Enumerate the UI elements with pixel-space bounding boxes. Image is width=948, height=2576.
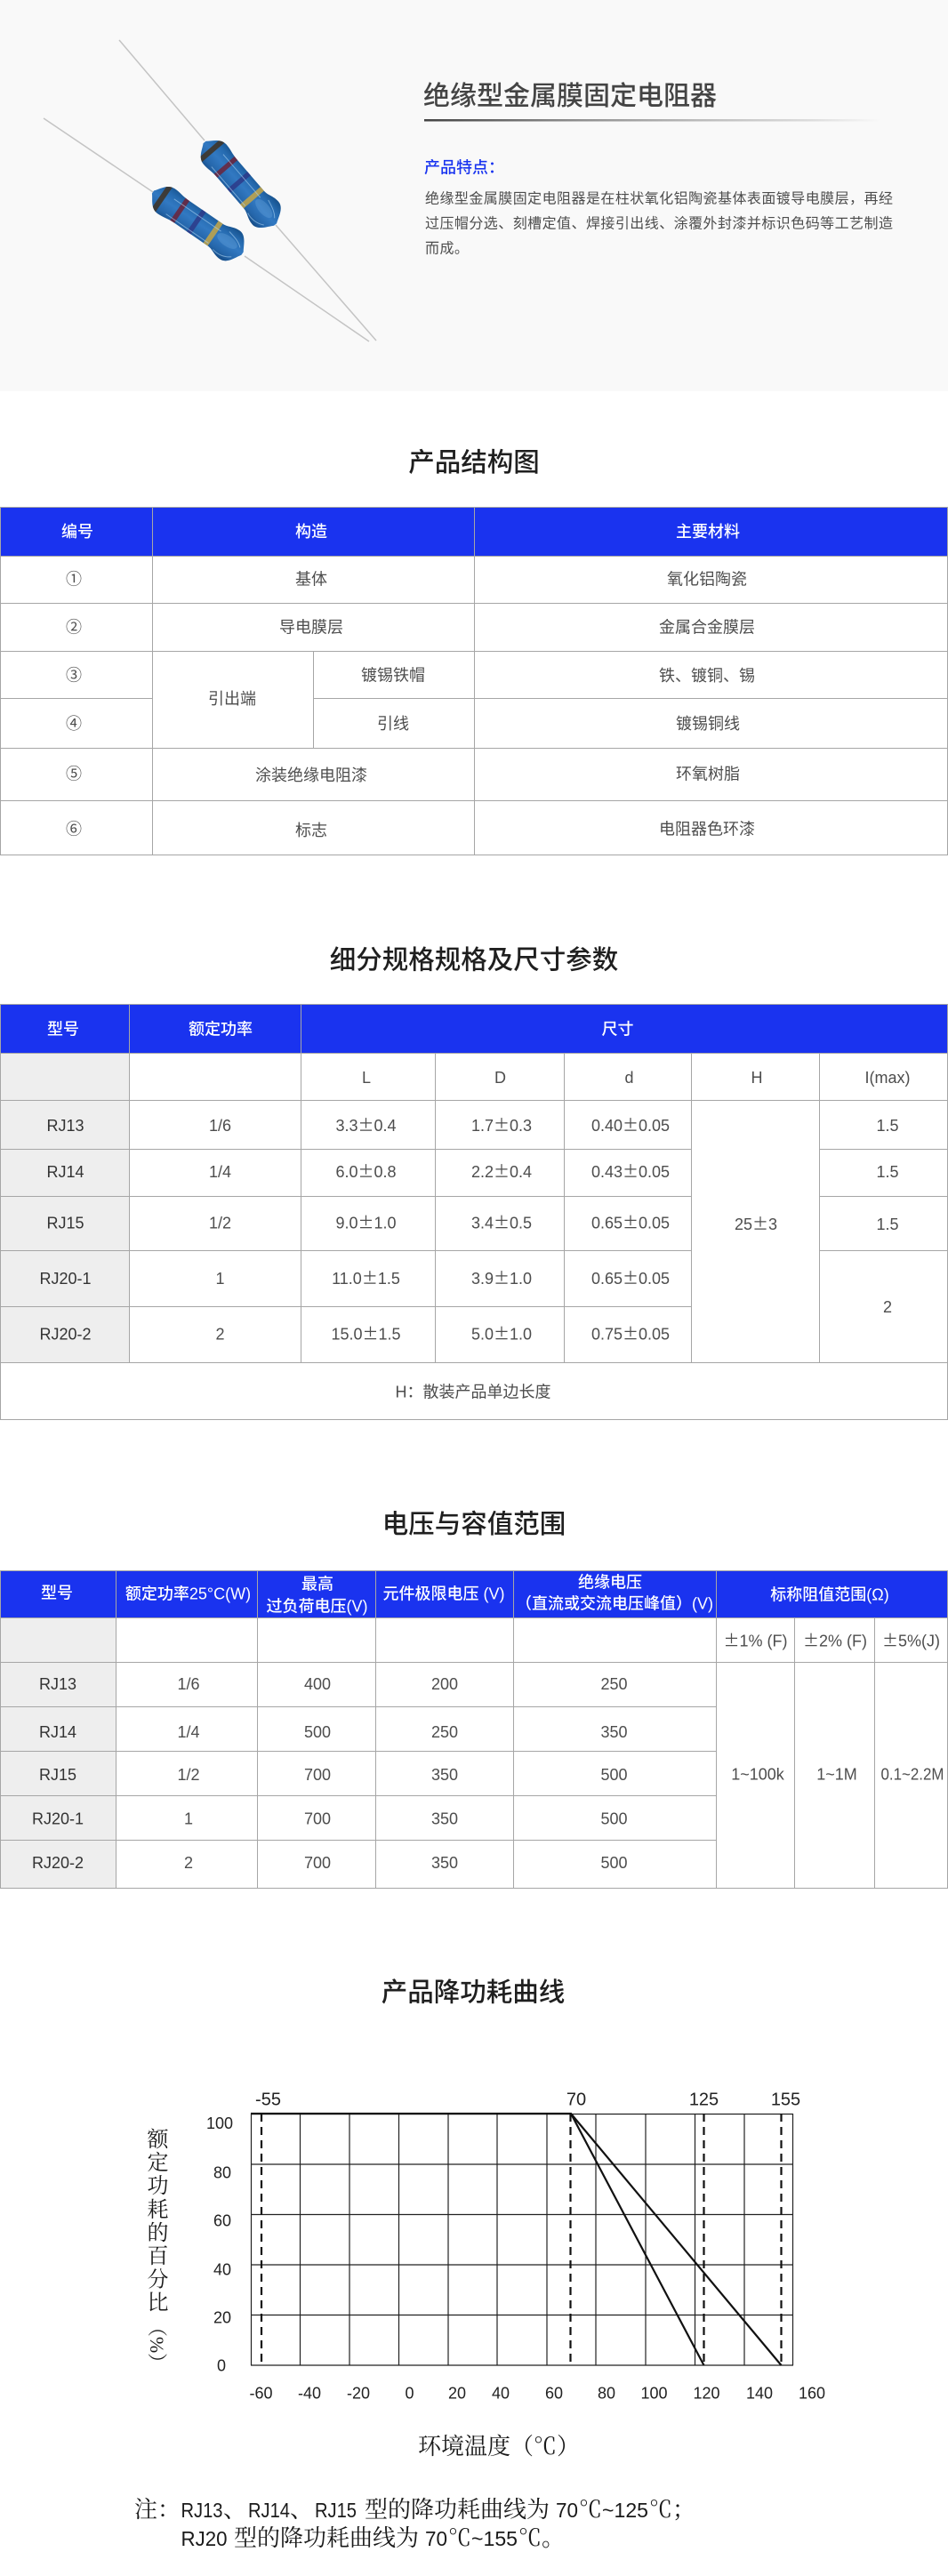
table body: 基体 xyxy=(295,571,327,589)
table body: 250 xyxy=(600,1675,628,1693)
table body: ③ xyxy=(66,667,82,685)
table body: 氧化铝陶瓷 xyxy=(667,571,747,589)
table body: 2.2±0.4 xyxy=(471,1160,532,1183)
table body: 3.9±1.0 xyxy=(471,1266,532,1289)
table header xyxy=(47,1021,633,1039)
x-axis values: 0 xyxy=(405,2385,414,2403)
table header: 构造 xyxy=(295,523,327,541)
y-axis title: 定 xyxy=(148,2151,169,2175)
table: specifications and dimensions xyxy=(0,1004,948,1420)
table header: 标称阻值范围(Ω) xyxy=(770,1586,889,1604)
table body: 1.7±0.3 xyxy=(471,1113,532,1136)
y-axis title: （%） xyxy=(146,2317,168,2372)
table body: RJ14 xyxy=(46,1163,84,1181)
table body: ±1% (F) xyxy=(724,1629,788,1652)
table body: 1/2 xyxy=(177,1766,200,1784)
table body: D xyxy=(494,1069,506,1087)
table body: d xyxy=(624,1069,634,1087)
table body: 500 xyxy=(600,1766,628,1784)
table body: 引线 xyxy=(377,715,409,733)
chart note: 70 xyxy=(556,2499,578,2522)
table body: 200 xyxy=(431,1675,458,1693)
x-axis values: -60 xyxy=(249,2385,273,2403)
table body: 1~1M xyxy=(816,1766,857,1784)
x-axis values: 20 xyxy=(448,2385,466,2403)
table body: 0.75±0.05 xyxy=(591,1321,670,1344)
table body: 1/6 xyxy=(177,1675,200,1693)
table body: ⑥ xyxy=(66,820,82,838)
table body: 5.0±1.0 xyxy=(471,1321,532,1344)
dashed limit lines xyxy=(261,2114,781,2365)
table header: 型号 xyxy=(41,1585,73,1602)
x-axis values xyxy=(249,2385,825,2403)
table header: 额定功率25°C(W) xyxy=(125,1585,251,1602)
table body: RJ20-1 xyxy=(32,1810,84,1828)
chart note: 型的降功耗曲线为 xyxy=(365,2497,550,2523)
table body: ② xyxy=(66,619,82,637)
chart note xyxy=(134,2497,695,2551)
table body: 环氧树脂 xyxy=(676,765,740,782)
table body: 电阻器色环漆 xyxy=(659,820,755,838)
table body: RJ20-2 xyxy=(39,1325,92,1343)
table body: 2 xyxy=(215,1325,225,1343)
table body: 0.40±0.05 xyxy=(591,1113,670,1136)
table body: 250 xyxy=(431,1723,458,1741)
x-axis title: 环境温度（℃） xyxy=(418,2434,580,2460)
image: two blue resistors xyxy=(44,40,376,341)
chart note: 型的降功耗曲线为 xyxy=(234,2525,419,2551)
icon: lower resistor xyxy=(44,118,369,341)
table body: ① xyxy=(66,571,82,589)
features description: 而成。 xyxy=(425,240,469,256)
table body: 2 xyxy=(883,1298,892,1316)
y-axis values: 100 xyxy=(206,2115,233,2132)
table body: 350 xyxy=(431,1766,458,1784)
chart note: ~155 xyxy=(471,2527,518,2550)
table body: 11.0±1.5 xyxy=(332,1266,400,1289)
table body: RJ14 xyxy=(39,1723,76,1741)
table body: 1.5 xyxy=(876,1163,899,1181)
table body: 导电膜层 xyxy=(279,619,343,637)
table header: 最高 xyxy=(301,1576,333,1593)
y-axis values: 0 xyxy=(217,2356,226,2374)
table header: 型号 xyxy=(47,1021,79,1039)
x-axis values: 100 xyxy=(640,2385,668,2403)
table header: 绝缘电压 xyxy=(578,1574,642,1592)
table body: I(max) xyxy=(864,1069,911,1087)
table header: 额定功率 xyxy=(189,1021,253,1039)
table body: 1 xyxy=(184,1810,193,1828)
y-axis values: 40 xyxy=(213,2260,231,2278)
chart note: ~125 xyxy=(602,2499,648,2522)
table body: 1/4 xyxy=(177,1723,200,1741)
table body: 25±3 xyxy=(735,1212,777,1235)
table body xyxy=(39,1069,911,1401)
y-axis values: 60 xyxy=(213,2212,231,2230)
y-axis values: 20 xyxy=(213,2308,231,2326)
table body: 1/6 xyxy=(209,1117,231,1135)
title underline xyxy=(424,119,880,121)
table body: 金属合金膜层 xyxy=(659,619,755,637)
x-axis values: 120 xyxy=(693,2385,720,2403)
top temperature markers: 155 xyxy=(771,2090,800,2109)
chart note: RJ13 xyxy=(181,2499,222,2522)
features description: 过压帽分选、刻槽定值、焊接引出线、涂覆外封漆并标识色码等工艺制造 xyxy=(425,215,893,231)
table body: 镀锡铜线 xyxy=(676,715,740,733)
y-axis values: 80 xyxy=(213,2164,231,2182)
table body: 1/4 xyxy=(209,1163,231,1181)
chart grid xyxy=(251,2114,793,2365)
y-axis title: 比 xyxy=(148,2291,169,2315)
heading: specifications: 细分规格规格及尺寸参数 xyxy=(330,946,618,975)
table body: ±5%(J) xyxy=(882,1629,940,1652)
table header: （直流或交流电压峰值）(V) xyxy=(516,1595,713,1613)
chart note: RJ14 xyxy=(248,2499,290,2522)
table body: H：散装产品单边长度 xyxy=(395,1384,551,1401)
table body xyxy=(66,571,755,839)
x-axis values: 60 xyxy=(545,2385,563,2403)
table body: 350 xyxy=(431,1854,458,1872)
heading: derating curve: 产品降功耗曲线 xyxy=(382,1978,565,2008)
table body: 15.0±1.5 xyxy=(331,1321,401,1344)
table: voltage and resistance range xyxy=(0,1570,948,1889)
top temperature markers xyxy=(255,2090,800,2109)
table body: L xyxy=(362,1069,371,1087)
y-axis title: 耗 xyxy=(148,2198,169,2222)
chart note: 、 xyxy=(290,2497,313,2523)
chart note: ℃。 xyxy=(518,2525,565,2551)
top temperature markers: 125 xyxy=(689,2090,719,2109)
features description xyxy=(425,190,893,256)
chart note: ℃ xyxy=(579,2497,602,2523)
table body: 400 xyxy=(304,1675,331,1693)
chart note: RJ15 xyxy=(315,2499,357,2522)
chart note: ℃ xyxy=(448,2525,471,2551)
y-axis title: 功 xyxy=(148,2174,169,2198)
x-axis values: 80 xyxy=(598,2385,615,2403)
table body: RJ13 xyxy=(46,1117,84,1135)
heading: voltage and resistance range: 电压与容值范围 xyxy=(382,1510,566,1539)
features description: 绝缘型金属膜固定电阻器是在柱状氧化铝陶瓷基体表面镀导电膜层，再经 xyxy=(425,190,893,206)
table body: RJ13 xyxy=(39,1675,76,1693)
icon: upper resistor xyxy=(119,40,376,341)
table body: 3.4±0.5 xyxy=(471,1211,532,1234)
table body: 1.5 xyxy=(876,1117,899,1135)
table body: 1~100k xyxy=(731,1766,785,1784)
table header xyxy=(61,523,740,541)
table: product structure xyxy=(0,507,948,855)
table body: 500 xyxy=(304,1723,331,1741)
derating curves xyxy=(251,2114,781,2365)
y-axis title xyxy=(146,2128,169,2372)
table body: 1/2 xyxy=(209,1215,231,1232)
table body: 0.65±0.05 xyxy=(591,1266,670,1289)
table body: 0.65±0.05 xyxy=(591,1211,670,1234)
table body: 700 xyxy=(304,1766,331,1784)
chart note: 70 xyxy=(425,2527,447,2550)
top temperature markers: 70 xyxy=(566,2090,586,2109)
chart note: 、 xyxy=(223,2497,246,2523)
table header: 元件极限电压 (V) xyxy=(382,1585,505,1602)
product title: 绝缘型金属膜固定电阻器 xyxy=(423,82,717,111)
table body: 1 xyxy=(215,1270,225,1288)
table body: 0.1~2.2M xyxy=(880,1766,944,1784)
table body: RJ20-2 xyxy=(32,1854,84,1872)
table body: 1.5 xyxy=(876,1216,899,1233)
table body: 350 xyxy=(600,1723,628,1741)
table body: 引出端 xyxy=(208,690,256,708)
table body: RJ15 xyxy=(46,1215,84,1232)
table body: 500 xyxy=(600,1810,628,1828)
table body: 涂装绝缘电阻漆 xyxy=(255,766,367,784)
table body: ±2% (F) xyxy=(803,1629,867,1652)
table header: 编号 xyxy=(61,523,93,541)
chart note: RJ20 xyxy=(181,2527,228,2550)
x-axis values: -40 xyxy=(298,2385,321,2403)
table header: 尺寸 xyxy=(601,1021,633,1039)
table body: 9.0±1.0 xyxy=(335,1211,397,1234)
panel: product hero xyxy=(43,39,893,342)
table body: 3.3±0.4 xyxy=(335,1113,397,1136)
table body: 700 xyxy=(304,1810,331,1828)
table body: ⑤ xyxy=(66,765,82,782)
table body: 6.0±0.8 xyxy=(335,1160,397,1183)
table body: ④ xyxy=(66,715,82,733)
table body: 700 xyxy=(304,1854,331,1872)
x-axis values: 160 xyxy=(799,2385,825,2403)
table body: H xyxy=(751,1069,763,1087)
top temperature markers: -55 xyxy=(255,2090,281,2109)
y-axis title: 分 xyxy=(148,2267,169,2292)
x-axis values: 40 xyxy=(492,2385,510,2403)
y-axis title: 百 xyxy=(148,2245,169,2268)
y-axis values xyxy=(206,2115,233,2374)
table header: 主要材料 xyxy=(676,523,740,541)
chart: power derating curve xyxy=(146,2090,825,2460)
table header xyxy=(41,1574,889,1615)
x-axis values: 140 xyxy=(746,2385,773,2403)
y-axis title: 的 xyxy=(148,2221,169,2245)
table body xyxy=(32,1629,944,1872)
table body: 2 xyxy=(184,1854,193,1872)
x-axis values: -20 xyxy=(347,2385,370,2403)
table body: 镀锡铁帽 xyxy=(361,667,425,685)
table body: 350 xyxy=(431,1810,458,1828)
table body: RJ20-1 xyxy=(39,1270,92,1288)
y-axis title: 额 xyxy=(148,2128,169,2152)
table body: 标志 xyxy=(295,822,327,839)
table body: 铁、镀铜、锡 xyxy=(659,667,755,685)
chart note: 注： xyxy=(134,2497,181,2523)
heading: structure: 产品结构图 xyxy=(408,448,540,477)
features label: 产品特点： xyxy=(424,158,504,176)
chart note: ℃； xyxy=(649,2497,695,2523)
table header: 过负荷电压(V) xyxy=(267,1597,368,1615)
table body: 0.43±0.05 xyxy=(591,1160,670,1183)
table body: 500 xyxy=(600,1854,628,1872)
table body: RJ15 xyxy=(39,1766,76,1784)
